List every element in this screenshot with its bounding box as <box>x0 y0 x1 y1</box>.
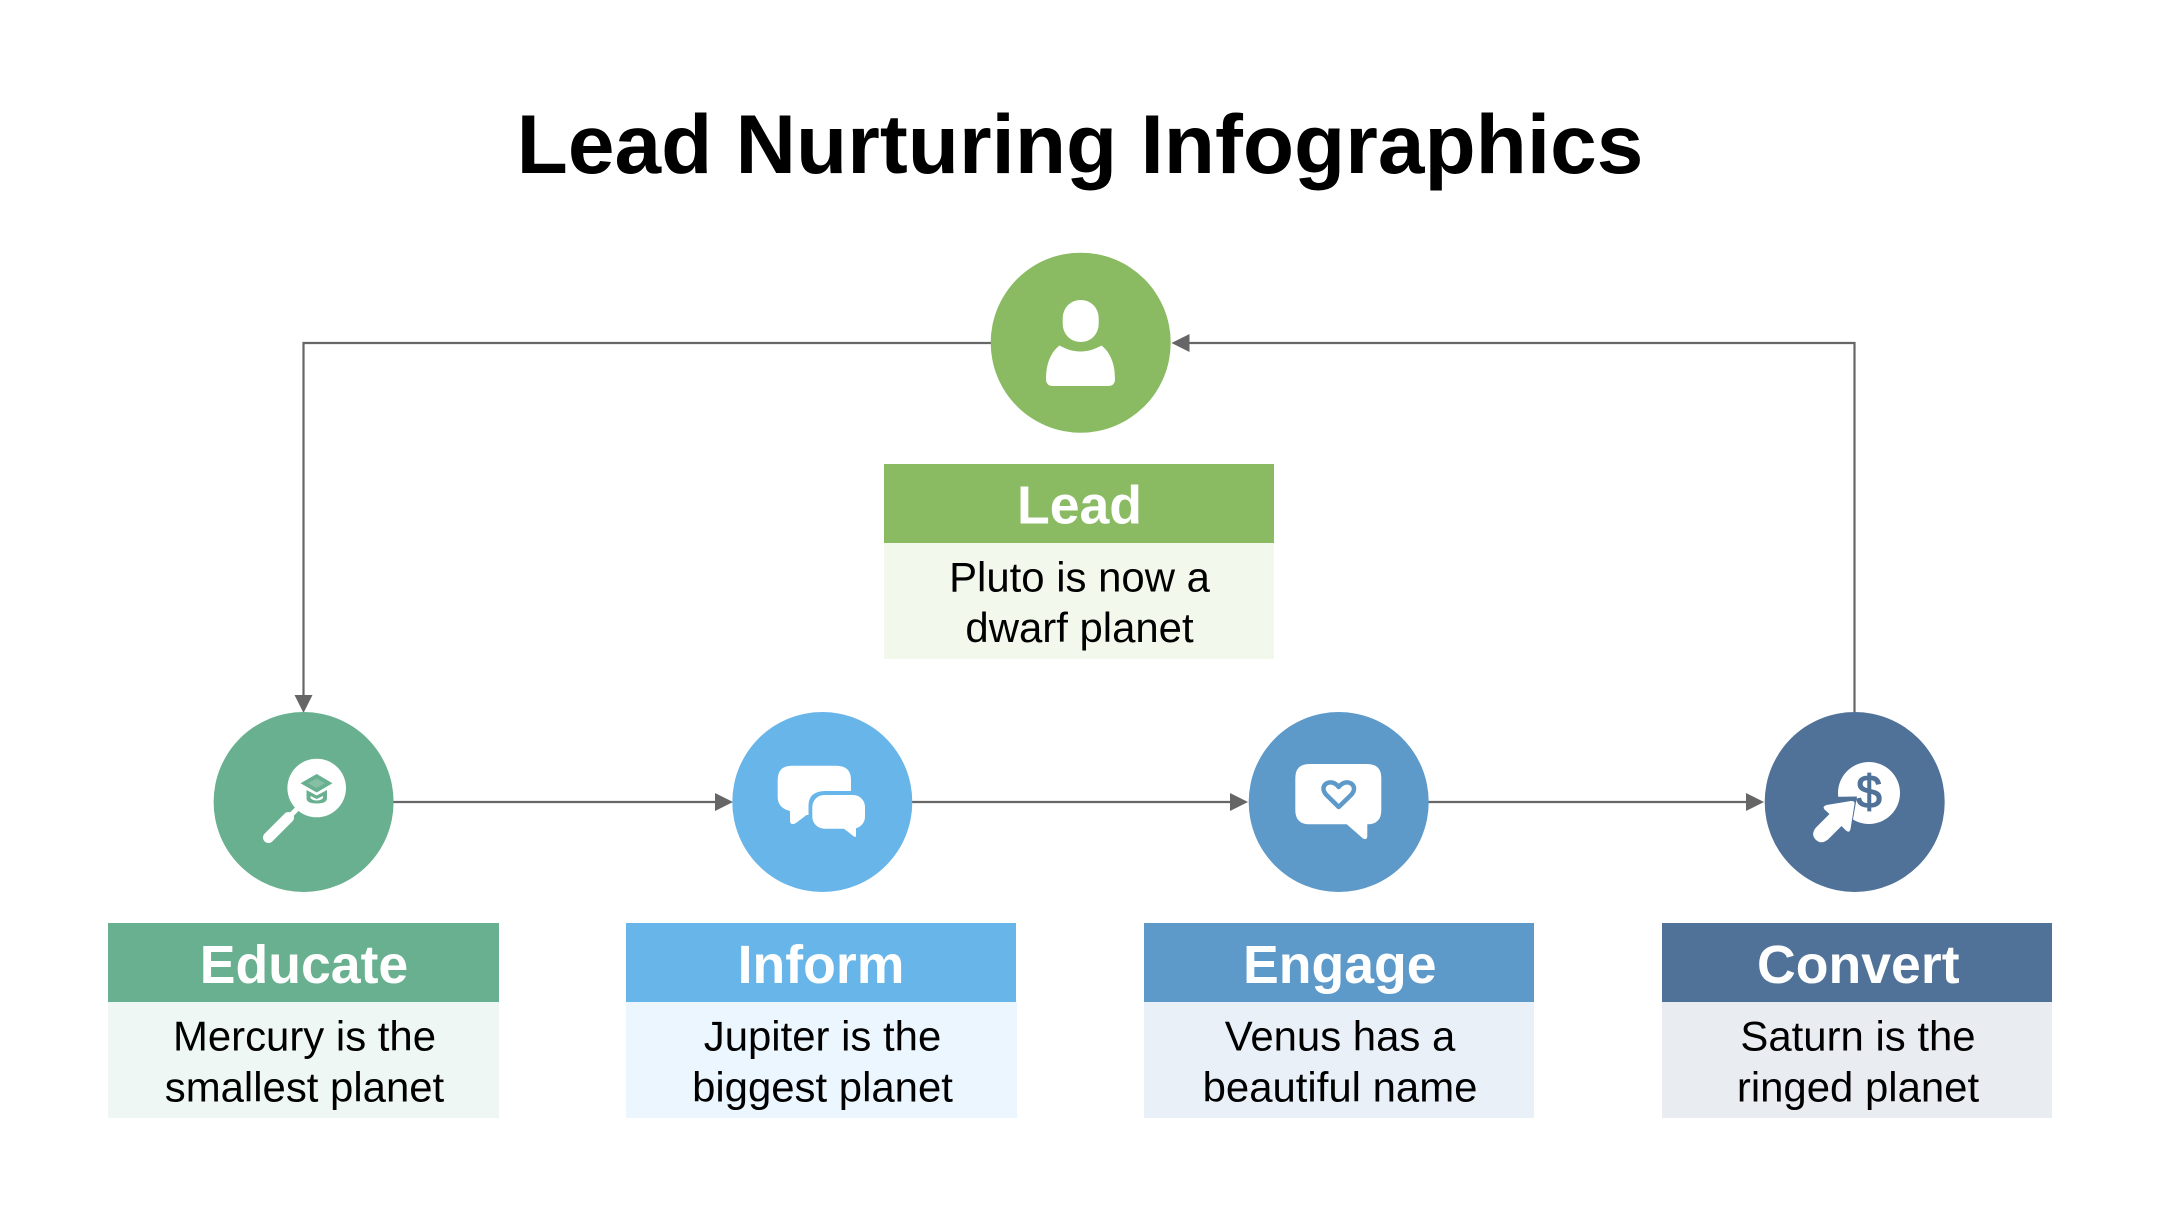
text: convert description: Saturn is the <box>1740 1012 1976 1060</box>
text: lead description: Pluto is now a <box>949 554 1210 600</box>
panel: inform <box>626 923 1017 1118</box>
text: lead description: dwarf planet <box>965 604 1194 651</box>
arrow: inform to engage <box>912 793 1248 811</box>
panel: educate <box>108 923 499 1118</box>
text: engage description: Venus has a <box>1225 1012 1455 1060</box>
panel: engage <box>1144 923 1534 1118</box>
icon: convert arrow with dollar coin <box>1765 712 1945 892</box>
heading: educate: Educate <box>200 935 408 995</box>
text: inform description: Jupiter is the <box>704 1012 941 1060</box>
title: Lead Nurturing Infographics <box>517 97 1643 191</box>
arrow: lead to educate <box>294 343 991 713</box>
text: engage description: beautiful name <box>1203 1064 1477 1110</box>
heading: lead: Lead <box>1017 476 1142 536</box>
heading: inform: Inform <box>738 935 904 995</box>
icon: inform speech bubbles <box>732 712 912 892</box>
heading: engage: Engage <box>1243 935 1437 995</box>
icon: lead person <box>991 253 1171 433</box>
heading: convert: Convert <box>1757 935 1960 995</box>
text: educate description: Mercury is the <box>173 1012 436 1060</box>
icon: engage speech bubble with heart <box>1249 712 1429 892</box>
icon: convert arrow with dollar coin: $ <box>1856 766 1882 818</box>
panel: lead <box>884 464 1274 659</box>
text: educate description: smallest planet <box>165 1064 445 1110</box>
icon: educate magnifier with graduation cap <box>214 712 394 892</box>
text: inform description: biggest planet <box>692 1064 953 1110</box>
arrow: convert to lead <box>1172 334 1854 712</box>
panel: convert <box>1662 923 2052 1118</box>
text: convert description: ringed planet <box>1737 1064 1979 1110</box>
arrow: engage to convert <box>1428 793 1764 811</box>
arrow: educate to inform <box>393 793 733 811</box>
